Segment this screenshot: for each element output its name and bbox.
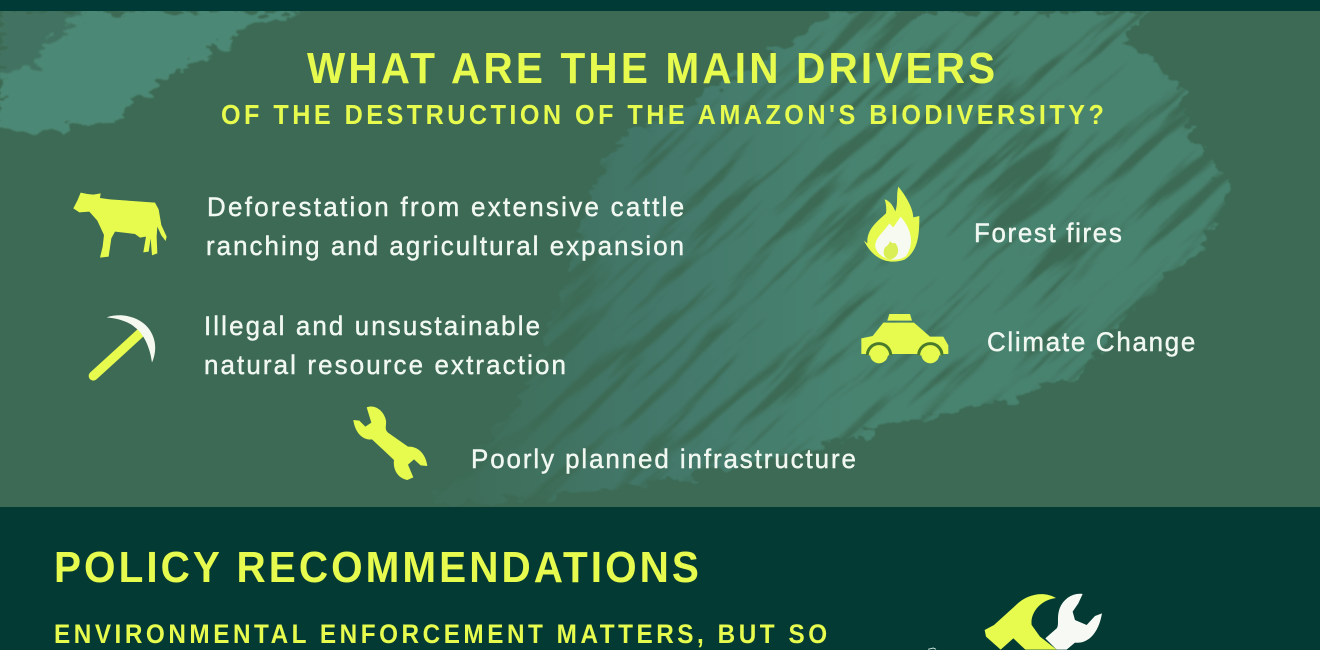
panel: policy recommendations (0, 507, 1320, 650)
subheading: destruction of biodiversity: OF THE DESTRUCTION OF THE AMAZON'S BIODIVERSITY? (221, 99, 1104, 130)
heading: main drivers: WHAT ARE THE MAIN DRIVERS (307, 43, 995, 92)
icon: hammer and wrench (928, 594, 1102, 650)
text: deforestation: Deforestation from extensive cattle (207, 192, 684, 222)
icon: cow (73, 193, 167, 258)
text: forest fires: Forest fires (974, 218, 1122, 248)
subheading: environmental enforcement: ENVIRONMENTAL ENFORCEMENT MATTERS, BUT SO (54, 620, 827, 649)
text: infrastructure: Poorly planned infrastructure (471, 444, 856, 474)
top band (0, 0, 1320, 11)
background brush strokes (0, 11, 1320, 507)
text: resource extraction: natural resource extraction (204, 350, 566, 380)
icon: car (861, 314, 948, 363)
text: deforestation (206, 192, 684, 261)
icon: pickaxe (93, 315, 155, 376)
text: resource extraction: Illegal and unsustainable (204, 311, 540, 341)
text: resource extraction (204, 311, 566, 380)
icon: flame (864, 187, 919, 262)
heading: policy recommendations: POLICY RECOMMENDATIONS (54, 542, 699, 591)
text: deforestation: ranching and agricultural expansion (206, 231, 684, 261)
panel: main drivers (0, 11, 1320, 507)
icon: wrench (353, 406, 427, 480)
text: climate change: Climate Change (987, 327, 1195, 357)
